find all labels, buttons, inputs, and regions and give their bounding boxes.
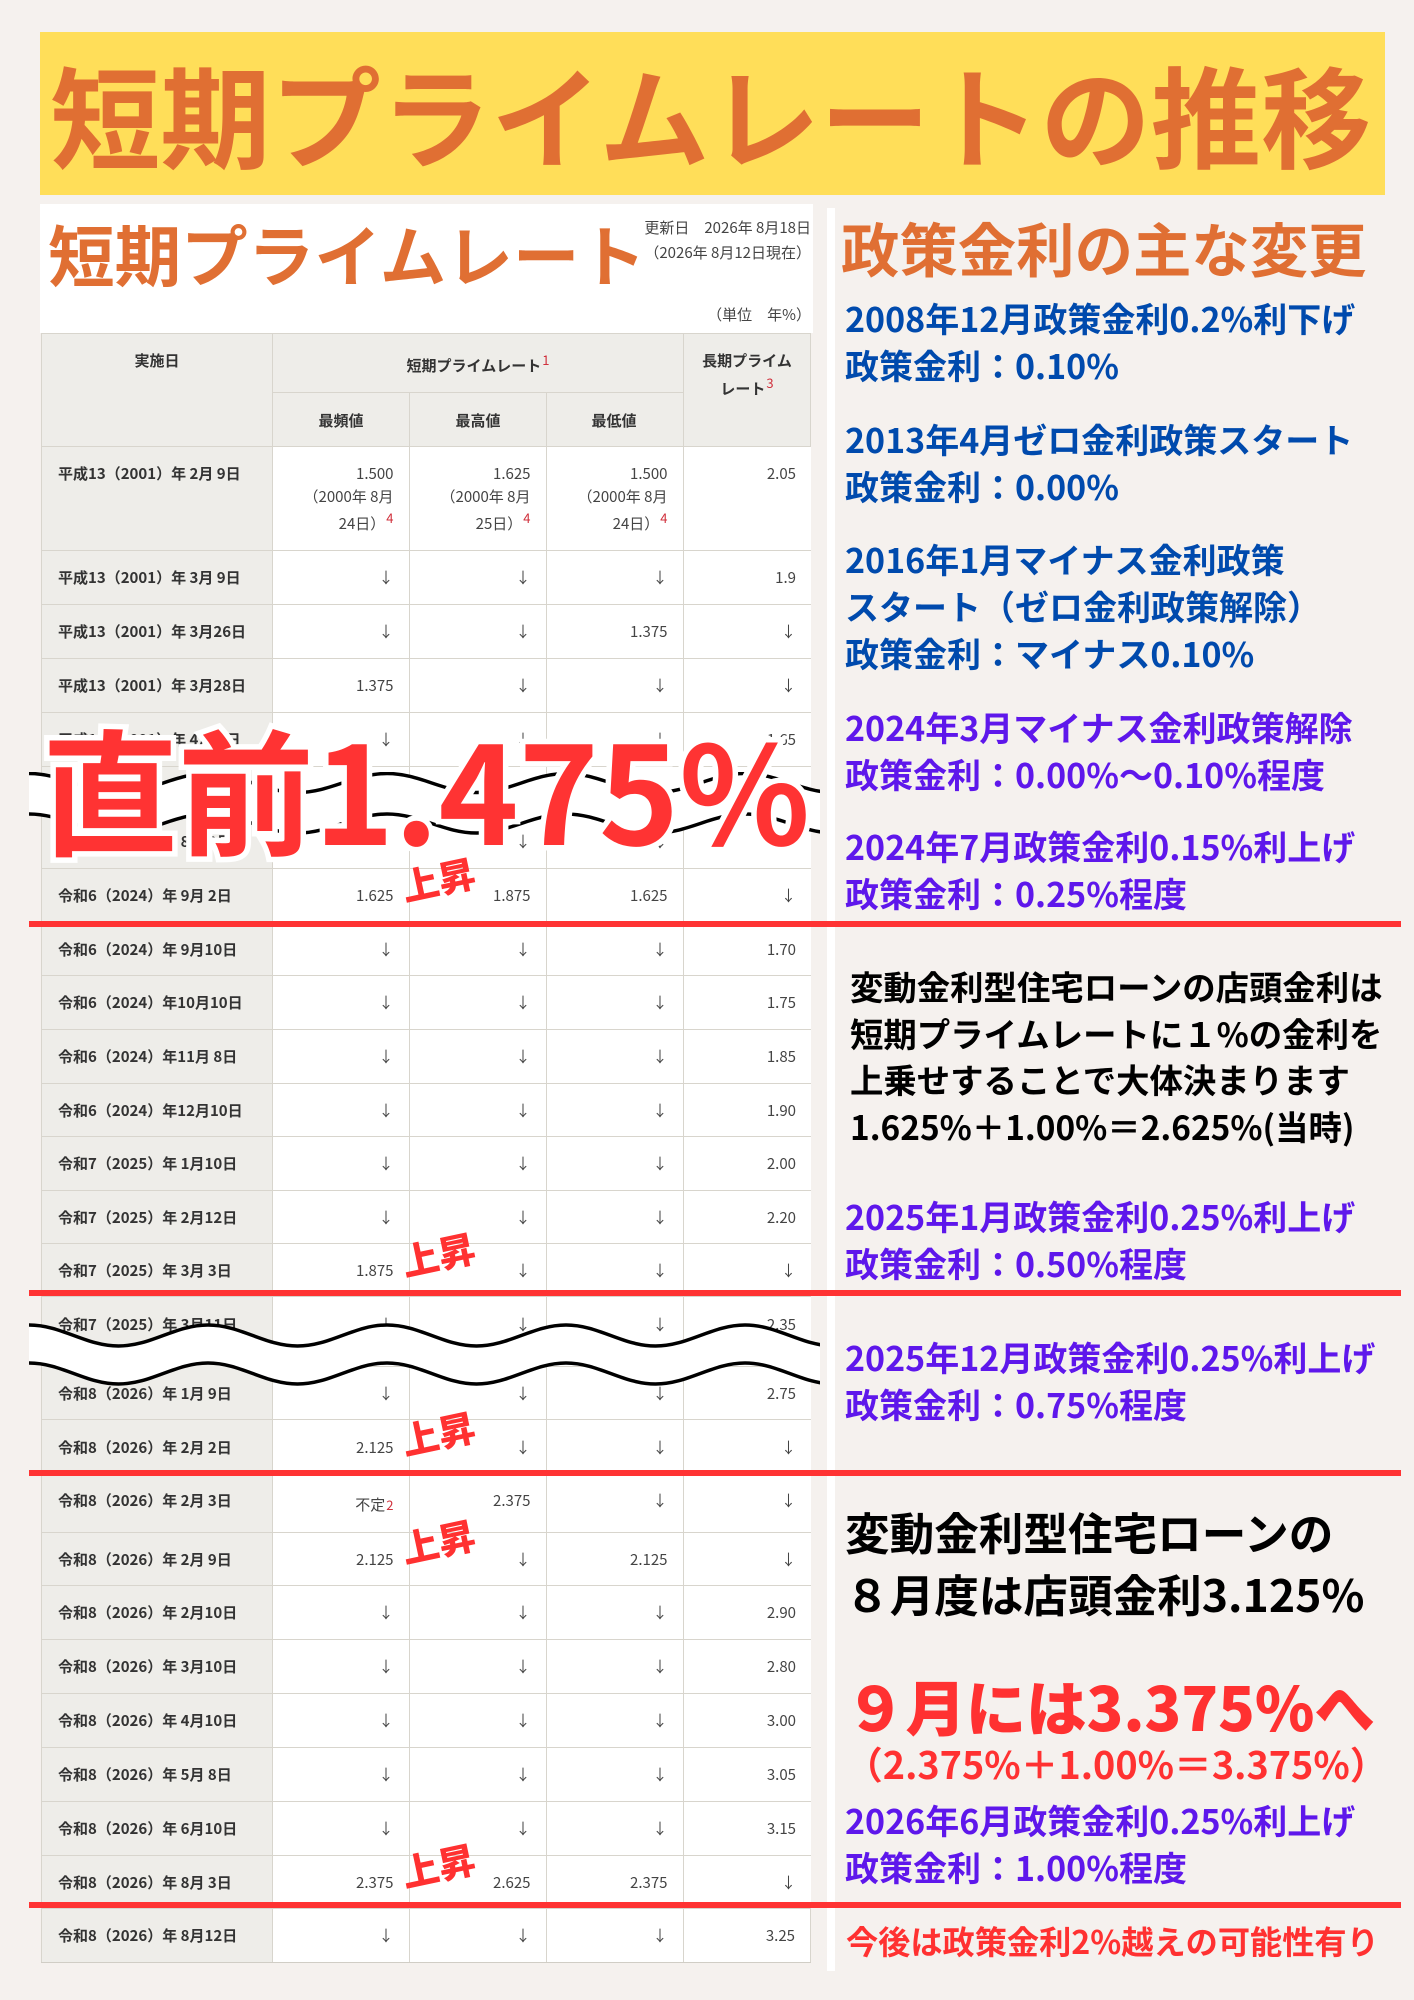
text block: 2008-12 change: 2008年12月政策金利0.2%利下げ bbox=[845, 293, 1355, 342]
wave break: lower table gap bbox=[29, 1323, 820, 1386]
row 2026-02-09 bbox=[41, 1533, 811, 1586]
row 2026-04-10: ↓ bbox=[378, 1710, 394, 1731]
row 2025-03-03: 令和7（2025）年 3月 3日 bbox=[58, 1260, 232, 1280]
text block: 2024-07 change: 政策金利：0.25%程度 bbox=[845, 868, 1187, 917]
text block: 2025-12 change: 2025年12月政策金利0.25%利上げ bbox=[845, 1332, 1375, 1381]
row 2025-03-11 bbox=[41, 1297, 811, 1352]
row 2026-05-08: 3.05 bbox=[767, 1764, 796, 1785]
red line: 2025-03 bbox=[29, 1290, 1401, 1296]
row 2026-08-03: 2.375 bbox=[630, 1872, 668, 1892]
row 2026-06-10: ↓ bbox=[652, 1818, 668, 1839]
text block: 2016-01 change: スタート（ゼロ金利政策解除） bbox=[845, 581, 1321, 630]
text block: 2016-01 change: 2016年1月マイナス金利政策 bbox=[845, 534, 1285, 583]
row 2001-04: ↓ bbox=[652, 729, 668, 750]
row 2025-03-11: 2.35 bbox=[767, 1314, 796, 1334]
header: highest: 最高値 bbox=[455, 410, 501, 431]
row 2026-02-03: ↓ bbox=[652, 1490, 668, 1511]
row 2024-09-10: ↓ bbox=[515, 938, 530, 960]
text block: 2025-01 change: 2025年1月政策金利0.25%利上げ bbox=[845, 1191, 1355, 1240]
row 2026-05-08: 令和8（2026）年 5月 8日 bbox=[58, 1764, 232, 1785]
text block: 2016-01 change: 政策金利：マイナス0.10% bbox=[845, 628, 1254, 677]
text block: 2026-06 change: 2026年6月政策金利0.25%利上げ bbox=[845, 1795, 1355, 1844]
row 2001-02-09: 1.500 bbox=[630, 463, 668, 484]
row 2026-02-02: 令和8（2026）年 2月 2日 bbox=[58, 1436, 232, 1458]
header: long-term prime rate: 長期プライム bbox=[702, 350, 792, 371]
row 2026-03-10: ↓ bbox=[652, 1656, 668, 1677]
row 2001-03-28: ↓ bbox=[781, 675, 796, 696]
text block: 2024-07 change: 2024年7月政策金利0.15%利上げ bbox=[845, 821, 1355, 870]
row 2026-04-10: 3.00 bbox=[767, 1710, 796, 1731]
row 2001-02-09: （2000年 8月 bbox=[304, 486, 394, 507]
row 2024-08 bbox=[41, 815, 811, 869]
text block: floating rate explanation: 1.625%＋1.00%＝2.625%(当時) bbox=[850, 1100, 1355, 1150]
row 2024-08: 令和6（2024）年 8月 9日 bbox=[58, 831, 232, 852]
row 2001-02-09: （2000年 8月 bbox=[578, 486, 668, 507]
row 2026-02-09: 2.125 bbox=[356, 1548, 394, 1570]
row hidden by break bbox=[41, 767, 811, 815]
heading: main policy rate changes: 政策金利の主な変更 bbox=[841, 204, 1367, 289]
row 2001-04 bbox=[41, 713, 811, 767]
row 2026-04-10: 令和8（2026）年 4月10日 bbox=[58, 1710, 237, 1731]
row 2024-12-10 bbox=[41, 1084, 811, 1137]
row 2001-03-28 bbox=[41, 659, 811, 713]
row 2024-08: ↓ bbox=[378, 831, 394, 852]
row 2026-08-03: 令和8（2026）年 8月 3日 bbox=[58, 1872, 232, 1892]
row 2026-06-10: 3.15 bbox=[767, 1818, 796, 1839]
row 2001-03-09: 1.9 bbox=[775, 567, 796, 588]
callout: just before 1.475%: 直前1.475% bbox=[42, 688, 810, 885]
row 2026-04-10: ↓ bbox=[652, 1710, 668, 1731]
text block: 2025-01 change bbox=[845, 1191, 1355, 1287]
row 2001-03-26: ↓ bbox=[378, 621, 394, 642]
row 2024-11-08 bbox=[41, 1030, 811, 1084]
row 2026-02-03: ↓ bbox=[781, 1490, 796, 1511]
row 2025-02-12: ↓ bbox=[378, 1206, 394, 1228]
red line: 2026-02 bbox=[29, 1470, 1401, 1476]
row 2001-04: 1.65 bbox=[767, 729, 796, 750]
row 2024-12-10: 令和6（2024）年12月10日 bbox=[58, 1100, 243, 1120]
row 2026-03-10: 2.80 bbox=[767, 1656, 796, 1677]
row 2026-08-03 bbox=[41, 1856, 811, 1909]
label: rise 2025-03: 上昇 bbox=[396, 1219, 480, 1287]
row 2001-03-09: 平成13（2001）年 3月 9日 bbox=[58, 567, 241, 588]
row 2025-03-11: ↓ bbox=[652, 1314, 668, 1334]
row 2024-08: ↓ bbox=[781, 831, 796, 852]
row 2026-02-02 bbox=[41, 1420, 811, 1475]
row 2025-03-11: ↓ bbox=[515, 1314, 530, 1334]
row 2025-03-03: ↓ bbox=[652, 1260, 668, 1280]
text block: 2024-03 change bbox=[845, 702, 1353, 798]
text block: floating rate explanation: 変動金利型住宅ローンの店頭金利は bbox=[850, 961, 1383, 1010]
text block: 2013-04 change: 政策金利：0.00% bbox=[845, 461, 1119, 510]
label: rise 2026-08: 上昇 bbox=[396, 1830, 480, 1898]
row 2024-11-08: 1.85 bbox=[767, 1046, 796, 1067]
row 2024-08: ↓ bbox=[652, 831, 668, 852]
table column header bbox=[41, 333, 811, 447]
header: long-term prime rate bbox=[702, 350, 792, 399]
red line: 2024-09 bbox=[29, 921, 1401, 927]
row 2024-12-10: 1.90 bbox=[767, 1100, 796, 1120]
row 2024-09-10: 1.70 bbox=[767, 938, 796, 960]
row 2025-02-12: ↓ bbox=[515, 1206, 530, 1228]
row 2001-03-09 bbox=[41, 551, 811, 605]
row 2026-02-10: ↓ bbox=[652, 1602, 668, 1623]
row 2026-02-02: ↓ bbox=[652, 1436, 668, 1458]
row 2025-03-03: ↓ bbox=[515, 1260, 530, 1280]
row 2001-03-28: 1.375 bbox=[356, 675, 394, 696]
text block: 2025-12 change bbox=[845, 1332, 1375, 1428]
row 2026-06-10: ↓ bbox=[378, 1818, 394, 1839]
row 2026-03-10: ↓ bbox=[378, 1656, 394, 1677]
row 2026-01-09: 2.75 bbox=[767, 1382, 796, 1404]
row 2001-03-26: ↓ bbox=[781, 621, 796, 642]
row 2026-01-09 bbox=[41, 1367, 811, 1420]
row 2001-03-28: ↓ bbox=[515, 675, 530, 696]
text block: 2008-12 change: 政策金利：0.10% bbox=[845, 340, 1119, 389]
row 2026-02-03: 令和8（2026）年 2月 3日 bbox=[58, 1490, 232, 1511]
row 2026-05-08 bbox=[41, 1748, 811, 1802]
row 2026-02-10: ↓ bbox=[515, 1602, 530, 1623]
row 2001-03-26: 平成13（2001）年 3月26日 bbox=[58, 621, 246, 642]
row 2026-02-03 bbox=[41, 1475, 811, 1533]
row 2025-01-10 bbox=[41, 1137, 811, 1191]
text block: 2024-07 change bbox=[845, 821, 1355, 917]
text block: floating rate explanation bbox=[850, 961, 1383, 1150]
row 2001-04: 平成13（2001）年 4月 2日 bbox=[58, 729, 241, 750]
row 2026-08-12: ↓ bbox=[652, 1925, 668, 1946]
row 2001-03-09: ↓ bbox=[378, 567, 394, 588]
row 2026-08-03: 2.625 bbox=[493, 1872, 530, 1892]
row 2001-03-26: 1.375 bbox=[630, 621, 668, 642]
row 2025-02-12: 令和7（2025）年 2月12日 bbox=[58, 1206, 237, 1228]
row 2026-02-10: 令和8（2026）年 2月10日 bbox=[58, 1602, 237, 1623]
row 2024-09-02: 1.625 bbox=[356, 885, 394, 906]
row 2025-03-03: ↓ bbox=[781, 1260, 796, 1280]
row 2026-06-10: ↓ bbox=[515, 1818, 530, 1839]
row 2026-02-09: 2.125 bbox=[630, 1548, 668, 1570]
row 2026-05-08: ↓ bbox=[652, 1764, 668, 1785]
row 2026-01-09: ↓ bbox=[652, 1382, 668, 1404]
row 2026-01-09: ↓ bbox=[515, 1382, 530, 1404]
row 2024-10-10: ↓ bbox=[652, 992, 668, 1013]
row 2026-06-10 bbox=[41, 1802, 811, 1856]
title banner bbox=[40, 32, 1385, 195]
row 2026-08-12 bbox=[41, 1909, 811, 1963]
row 2025-01-10: 2.00 bbox=[767, 1153, 796, 1174]
text block: 2013-04 change bbox=[845, 414, 1353, 510]
update date: 更新日 2026年 8月18日 bbox=[644, 217, 811, 238]
panel: table page header bbox=[40, 204, 813, 333]
label: rise 2024-09: 上昇 bbox=[396, 844, 480, 912]
row 2024-09-10 bbox=[41, 923, 811, 976]
row 2024-12-10: ↓ bbox=[378, 1100, 394, 1120]
row 2001-02-09 bbox=[41, 447, 811, 551]
row 2026-05-08: ↓ bbox=[515, 1764, 530, 1785]
header divider bbox=[272, 334, 273, 447]
row 2026-02-03: 2 bbox=[386, 1494, 394, 1514]
formula: September rate: （2.375%＋1.00%＝3.375%） bbox=[845, 1735, 1388, 1790]
row 2026-02-03: 2.375 bbox=[493, 1490, 530, 1511]
text block: August store rate: 変動金利型住宅ローンの bbox=[845, 1498, 1333, 1563]
row 2001-02-09: 1.625 bbox=[493, 463, 530, 484]
row 2025-02-12: 2.20 bbox=[767, 1206, 796, 1228]
row 2026-02-03: 不定 bbox=[355, 1494, 385, 1515]
row 2025-01-10: ↓ bbox=[515, 1153, 530, 1174]
text block: 2016-01 change bbox=[845, 534, 1321, 677]
row 2001-02-09: 24日）4 bbox=[339, 508, 394, 534]
row 2026-06-10: 令和8（2026）年 6月10日 bbox=[58, 1818, 237, 1839]
row 2001-04: ↓ bbox=[378, 729, 394, 750]
header: long-term prime rate: レート3 bbox=[720, 373, 774, 399]
row 2026-08-03: 2.375 bbox=[356, 1872, 394, 1892]
row 2024-09-10: 令和6（2024）年 9月10日 bbox=[58, 938, 237, 960]
row 2026-02-10: ↓ bbox=[378, 1602, 394, 1623]
row 2024-09-02: 1.625 bbox=[630, 885, 668, 906]
row 2025-02-12: ↓ bbox=[652, 1206, 668, 1228]
row 2024-08: ↓ bbox=[515, 831, 530, 852]
label: rise 2026-02-09: 上昇 bbox=[396, 1506, 480, 1574]
row 2024-09-10: ↓ bbox=[652, 938, 668, 960]
row 2001-03-09: ↓ bbox=[652, 567, 668, 588]
header: lowest: 最低値 bbox=[591, 410, 637, 431]
row 2001-03-28: 平成13（2001）年 3月28日 bbox=[58, 675, 246, 696]
header: short-term prime rate: 短期プライムレート1 bbox=[407, 350, 549, 376]
text block: 2008-12 change bbox=[845, 293, 1355, 389]
row 2001-03-26: ↓ bbox=[515, 621, 530, 642]
table page heading: 短期プライムレート bbox=[48, 205, 646, 301]
row 2026-02-02: 2.125 bbox=[356, 1436, 394, 1458]
row 2024-09-02: 1.875 bbox=[493, 885, 530, 906]
row 2026-04-10: ↓ bbox=[515, 1710, 530, 1731]
row 2024-11-08: ↓ bbox=[652, 1046, 668, 1067]
row 2025-03-11: ↓ bbox=[378, 1314, 394, 1334]
text block: 2026-06 change: 政策金利：1.00%程度 bbox=[845, 1842, 1187, 1891]
row 2026-01-09: 令和8（2026）年 1月 9日 bbox=[58, 1382, 232, 1404]
row 2024-11-08: 令和6（2024）年11月 8日 bbox=[58, 1046, 237, 1067]
row 2024-12-10: ↓ bbox=[652, 1100, 668, 1120]
row 2024-09-02: 令和6（2024）年 9月 2日 bbox=[58, 885, 232, 906]
text block: 2024-03 change: 2024年3月マイナス金利政策解除 bbox=[845, 702, 1353, 751]
row 2024-12-10: ↓ bbox=[515, 1100, 530, 1120]
callout: September rate: ９月には3.375%へ bbox=[845, 1662, 1375, 1749]
row 2024-10-10: 令和6（2024）年10月10日 bbox=[58, 992, 243, 1013]
unit note: （単位 年%） bbox=[707, 304, 811, 325]
row 2025-03-03: 1.875 bbox=[356, 1260, 394, 1280]
row 2001-02-09: 24日）4 bbox=[613, 508, 668, 534]
row 2026-03-10: 令和8（2026）年 3月10日 bbox=[58, 1656, 237, 1677]
row 2026-04-10 bbox=[41, 1694, 811, 1748]
as-of date: （2026年 8月12日現在） bbox=[644, 242, 811, 263]
label: rise 2026-02-02: 上昇 bbox=[396, 1398, 480, 1466]
panel: prime rate table bbox=[41, 333, 811, 1963]
row 2026-02-09: ↓ bbox=[515, 1548, 530, 1570]
row 2026-08-12: 令和8（2026）年 8月12日 bbox=[58, 1925, 237, 1946]
row 2026-02-02: ↓ bbox=[515, 1436, 530, 1458]
row 2026-02-02: ↓ bbox=[781, 1436, 796, 1458]
row 2026-08-12: ↓ bbox=[378, 1925, 394, 1946]
text block: 2013-04 change: 2013年4月ゼロ金利政策スタート bbox=[845, 414, 1353, 463]
row 2001-02-09: 25日）4 bbox=[476, 508, 530, 534]
row 2026-01-09: ↓ bbox=[378, 1382, 394, 1404]
row 2026-02-09: ↓ bbox=[781, 1548, 796, 1570]
header: mode: 最頻値 bbox=[318, 410, 364, 431]
text block: 2025-12 change: 政策金利：0.75%程度 bbox=[845, 1379, 1187, 1428]
row 2001-03-28: ↓ bbox=[652, 675, 668, 696]
row 2024-10-10 bbox=[41, 976, 811, 1030]
row hidden by break bbox=[41, 1352, 811, 1367]
text block: 2024-03 change: 政策金利：0.00%～0.10%程度 bbox=[845, 749, 1325, 798]
row 2026-03-10: ↓ bbox=[515, 1656, 530, 1677]
row 2026-08-12: 3.25 bbox=[766, 1925, 795, 1946]
row 2025-03-11: 令和7（2025）年 3月11日 bbox=[58, 1314, 237, 1334]
text block: August store rate: ８月度は店頭金利3.125% bbox=[845, 1560, 1364, 1625]
row 2024-09-02: ↓ bbox=[781, 885, 796, 906]
row 2025-02-12 bbox=[41, 1191, 811, 1244]
text block: 2026-06 change bbox=[845, 1795, 1355, 1891]
text block: floating rate explanation: 短期プライムレートに１%の金利を bbox=[850, 1008, 1382, 1056]
row 2024-10-10: 1.75 bbox=[767, 992, 796, 1013]
row 2001-03-09: ↓ bbox=[515, 567, 530, 588]
row 2001-02-09: 1.500 bbox=[356, 463, 394, 484]
row 2025-03-03 bbox=[41, 1244, 811, 1297]
closing note: 今後は政策金利2%越えの可能性有り bbox=[846, 1918, 1379, 1964]
row 2001-04: ↓ bbox=[515, 729, 530, 750]
row 2024-11-08: ↓ bbox=[515, 1046, 530, 1067]
row 2001-02-09: 2.05 bbox=[767, 463, 796, 484]
row 2025-01-10: 令和7（2025）年 1月10日 bbox=[58, 1153, 237, 1174]
row 2026-02-10 bbox=[41, 1586, 811, 1640]
row 2025-01-10: ↓ bbox=[378, 1153, 394, 1174]
row 2026-02-09: 令和8（2026）年 2月 9日 bbox=[58, 1548, 232, 1570]
row 2001-02-09: 平成13（2001）年 2月 9日 bbox=[58, 463, 241, 484]
text block: floating rate explanation: 上乗せすることで大体決まります bbox=[850, 1054, 1350, 1103]
white vertical divider bbox=[827, 208, 835, 1971]
row 2025-01-10: ↓ bbox=[652, 1153, 668, 1174]
row 2026-03-10 bbox=[41, 1640, 811, 1694]
row 2001-03-26 bbox=[41, 605, 811, 659]
row 2001-02-09: （2000年 8月 bbox=[440, 486, 530, 507]
text block: 2025-01 change: 政策金利：0.50%程度 bbox=[845, 1238, 1187, 1287]
row 2026-05-08: ↓ bbox=[378, 1764, 394, 1785]
row 2024-09-10: ↓ bbox=[378, 938, 394, 960]
row 2024-10-10: ↓ bbox=[378, 992, 394, 1013]
row 2024-11-08: ↓ bbox=[378, 1046, 394, 1067]
wave break: upper table gap bbox=[29, 772, 820, 835]
header: date: 実施日 bbox=[134, 350, 180, 371]
text block: August store rate bbox=[845, 1498, 1364, 1625]
red line: 2026-08 bbox=[29, 1902, 1401, 1908]
row 2026-08-12: ↓ bbox=[515, 1925, 530, 1946]
title text: 短期プライムレートの推移 bbox=[50, 32, 1371, 192]
row 2026-08-03: ↓ bbox=[781, 1872, 796, 1892]
row 2026-02-10: 2.90 bbox=[767, 1602, 796, 1623]
row 2024-09-02 bbox=[41, 869, 811, 923]
row 2024-10-10: ↓ bbox=[515, 992, 530, 1013]
